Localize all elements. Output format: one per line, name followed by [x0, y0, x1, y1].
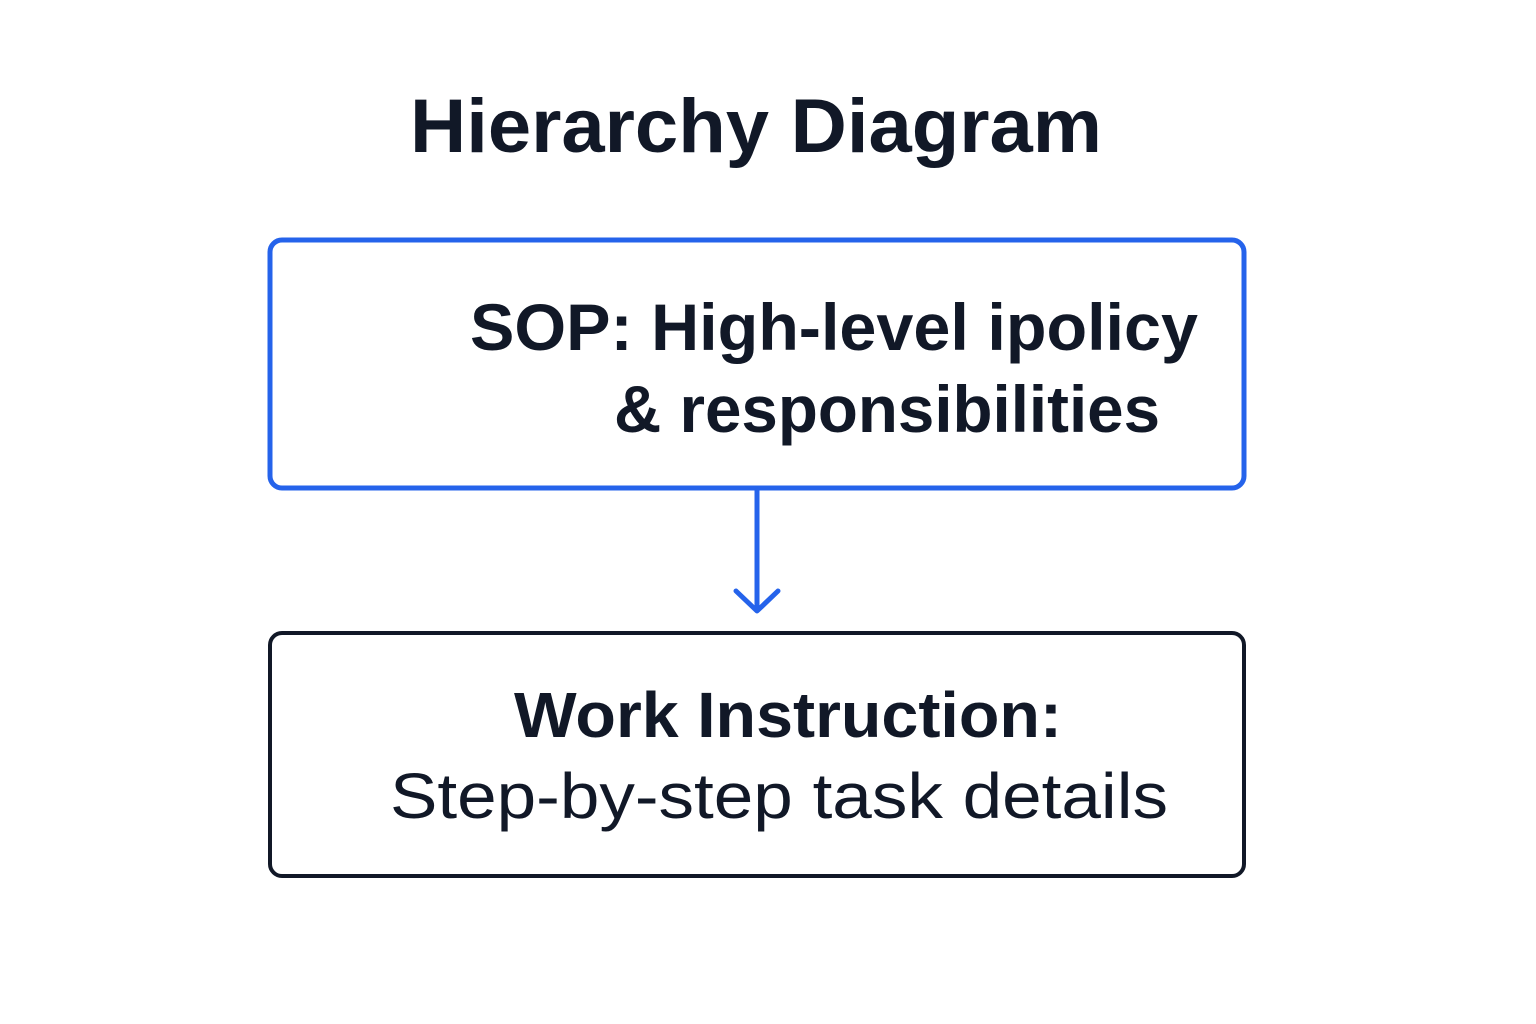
- text: Step-by-step: Step-by-step task details: [390, 760, 1168, 832]
- text: Work Instruction heading: Work Instruction:: [514, 679, 1062, 751]
- panel: SOP box: [270, 240, 1244, 488]
- title: Hierarchy Diagram: [410, 84, 1102, 169]
- text: SOP line 1: SOP: High-level ipolicy: [470, 290, 1198, 364]
- arrow: [736, 490, 778, 611]
- panel: Work Instruction box: [270, 633, 1244, 876]
- text: SOP line 2: & responsibilities: [614, 372, 1160, 446]
